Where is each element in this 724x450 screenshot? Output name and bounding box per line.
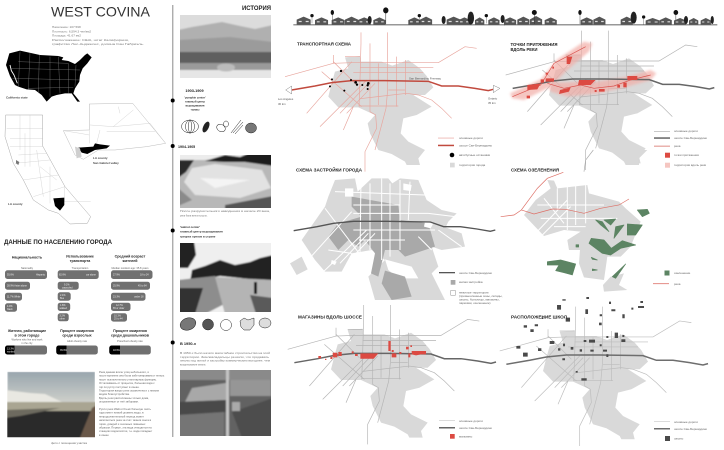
- text block: pumpkin center 1903-1909: главный центр: [185, 100, 205, 104]
- photo: aerial view: [178, 368, 273, 438]
- heading: attraction points along the river: ТОЧКИ ПРИТЯЖЕНИЯ: [510, 42, 558, 47]
- chart: transport use: 3.2%: [60, 314, 66, 318]
- legend: schools: [654, 420, 707, 441]
- chart: nationality: [5, 256, 47, 312]
- chart: preschool obesity: Процент ожирения: [113, 329, 147, 333]
- text block: walnut center: [180, 225, 223, 238]
- chart: nationality: black: [7, 308, 13, 311]
- photo: flooded river: [180, 155, 271, 208]
- map: California counties: [5, 115, 91, 224]
- photo: concrete river channel: [5, 372, 97, 440]
- chart: preschool obesity: 18.6%: [113, 349, 121, 352]
- text block: river description: Территория вокруг реки ограничена и с низким: [99, 388, 159, 392]
- legend: schools: школы: [674, 436, 683, 440]
- text block: pumpkin center 1903-1909: тыквы: [191, 108, 200, 112]
- chart: median age: 18 to 24: [140, 274, 149, 276]
- heading: shops: МАГАЗИНЫ ВДОЛЬ ШОССЕ: [298, 314, 362, 320]
- text block: river description: станциях водоочистки, т.е. вода попадает: [99, 430, 153, 433]
- heading: population data: ДАННЫЕ ПО НАСЕЛЕНИЮ ГОРОДА: [4, 240, 113, 246]
- text block: river description: [99, 370, 165, 437]
- legend: schools: шоссе Сан-Бернардино: [674, 427, 707, 431]
- text block: city facts: Площадь: 41.67 км2: [52, 34, 81, 38]
- text block: river description: Русло реки Walnut Creek большую часть: [99, 407, 151, 411]
- chart: median age: under 18: [134, 296, 144, 298]
- text block: city facts: Расположение: США, штат Калифорния,: [52, 38, 129, 42]
- chart: transport use: [58, 255, 99, 321]
- map: attraction points along the river: [506, 31, 714, 170]
- chart: transport use: carpooled: [62, 286, 73, 289]
- text block: river description: горах, дождей и сезонных ливневых: [99, 422, 146, 426]
- legend: city development: школы, больницы, магазины,: [459, 298, 500, 302]
- text block: city facts: Население: 107.598: [52, 25, 81, 29]
- chart: transport use: транспорта: [70, 259, 91, 263]
- label: Los Angeles distance: [278, 97, 294, 106]
- icons: walnut and crops: [178, 316, 271, 332]
- label: Los Angeles distance: 30 km: [278, 102, 286, 106]
- chart: transport use: car alone: [86, 274, 97, 276]
- text block: pumpkin center 1903-1909: выращивания: [186, 104, 205, 108]
- chart: transport use: 1.8%: [60, 304, 66, 307]
- text block: 1950s development: В 1950-х было начато масштабное строительство на этой: [180, 351, 271, 355]
- chart: residents working in the city: в этом городе: [15, 333, 39, 337]
- icons: pumpkin and crops: [182, 120, 256, 134]
- chart: transport use: other: [60, 318, 65, 320]
- text block: river description: после времени она была забетонирована и теперь: [99, 374, 165, 378]
- legend: attraction points: [654, 129, 707, 168]
- legend: city development: шоссе Сан-Бернардино: [459, 271, 492, 275]
- chart: residents working in the city: Workers who live and work: [12, 337, 43, 341]
- label: LA county San Gabriel valley: San Gabriel valley: [93, 161, 119, 165]
- text block: river description: в океан: [99, 434, 109, 437]
- chart: median age: 12.7%: [116, 304, 124, 307]
- heading: schools: РАСПОЛОЖЕНИЕ ШКОЛ: [511, 314, 567, 320]
- map: United States with California highlighted: [6, 51, 92, 102]
- text block: river description: гор по руслу поступает в океан.: [99, 386, 140, 389]
- chart: median age: 65 or older: [113, 307, 125, 310]
- legend: attraction points: точки притяжения: [674, 153, 699, 157]
- caption: flood: [180, 210, 270, 217]
- legend: transport: территория города: [459, 163, 486, 167]
- chart: residents working in the city: in the city: [22, 341, 33, 345]
- chart: nationality: 11.7% White: [7, 296, 21, 298]
- legend: transport: автобусные остановки: [459, 153, 491, 157]
- text: 1950s: В 1950-х: [180, 341, 197, 346]
- legend: schools: основные дороги: [674, 420, 698, 424]
- legend: transport: основные дороги: [459, 136, 483, 140]
- chart: median age: [111, 255, 152, 322]
- map: transport scheme: [285, 32, 500, 172]
- text block: river description: Вдоль реки расположены только дома,: [99, 396, 149, 400]
- text block: walnut center: 'walnut center': [180, 225, 200, 229]
- heading: attraction points along the river: [510, 42, 558, 52]
- text block: river description: года имеет низкий уровень воды, в: [99, 411, 144, 415]
- legend: city development: жилая застройка: [459, 280, 483, 284]
- legend: attraction points: река: [674, 144, 681, 148]
- chart: adult obesity: [56, 329, 98, 354]
- heading: attraction points along the river: ВДОЛЬ РЕКИ: [510, 47, 538, 52]
- text block: pumpkin center 1903-1909: 1903-1909: [185, 89, 204, 93]
- chart: transport use: 9.2%: [64, 283, 70, 286]
- chart: nationality: Nationality: [21, 266, 34, 270]
- chart: nationality: Hispanic: [36, 274, 46, 276]
- heading: greenery scheme: СХЕМА ОЗЕЛЕНЕНИЯ: [511, 168, 559, 172]
- label: California state: California state: [6, 96, 28, 100]
- text block: 1950s development: землю под жильё и застройку коммерческим выгоднее, чем: [180, 359, 270, 363]
- chart: median age: 45 to 64: [138, 284, 147, 288]
- text block: river description: образом. Первое, эта вода очищается на: [99, 426, 152, 430]
- text block: city facts: [52, 25, 144, 46]
- text: 1904-1905: 1904-1905: [178, 145, 195, 149]
- chart: nationality: 55.6%: [7, 274, 15, 276]
- caption: site visit photo: фото с посещения участка: [51, 441, 87, 445]
- map: school locations: [500, 297, 708, 446]
- label: LA county San Gabriel valley: LA county: [93, 156, 108, 160]
- title: WEST COVINA: [51, 4, 151, 20]
- skyline left: [293, 7, 505, 25]
- caption: flood: После разрушительного наводнения в начале 20 века,: [180, 210, 270, 213]
- timeline axis: [171, 5, 175, 437]
- text block: 1950s development: [180, 351, 271, 366]
- chart: adult obesity: Процент ожирения: [60, 329, 94, 333]
- text block: city facts: графство Лос-Анджелес, долина Сан Габриэль.: [52, 42, 144, 46]
- caption: flood: река бала взята в русло.: [180, 214, 208, 217]
- legend: city development: (промышленные зоны, склады,: [459, 294, 503, 298]
- chart: median age: 10.1%: [114, 314, 122, 318]
- chart: transport use: 2.4%: [60, 294, 66, 297]
- heading: city development: СХЕМА ЗАСТРОЙКИ ГОРОДА: [296, 166, 363, 172]
- text block: river description: носит исключительно утилитарную функцию.: [99, 377, 157, 381]
- label: Ontario distance: 35 km: [488, 101, 496, 105]
- text block: 1950s development: возделывание земли.: [180, 363, 206, 366]
- chart: residents working in the city: Жители, работающие: [7, 329, 46, 333]
- chart: median age: Средний возраст: [115, 255, 146, 259]
- text block: walnut center: главный центр выращивания: [180, 230, 223, 234]
- chart: residents working in the city: [5, 329, 47, 354]
- chart: median age: 27.9%: [113, 274, 121, 276]
- chart: preschool obesity: Preschool obesity rate: [117, 339, 143, 343]
- label: LA county: LA county: [8, 202, 23, 206]
- chart: transport use: Bus: [60, 297, 65, 300]
- map: greenery scheme: [501, 150, 649, 292]
- chart: nationality: 4.0%: [7, 305, 13, 308]
- label: LA county San Gabriel valley: [93, 156, 119, 165]
- legend: greenery: озеленение: [674, 271, 691, 275]
- legend: greenery: [653, 270, 691, 286]
- map: shops along the highway: [288, 305, 496, 444]
- chart: transport use: 82.6%: [59, 274, 67, 276]
- text block: city facts: Плотность: 6,594.3 чел/км2: [52, 29, 91, 33]
- legend: greenery: река: [674, 282, 681, 286]
- chart: median age: 23.3%: [113, 296, 121, 298]
- chart: median age: 25 to 44: [114, 318, 123, 320]
- legend: attraction points: территория вдоль реки: [674, 163, 707, 167]
- text block: river description: Река данная возле улиц небольшого, и: [99, 370, 149, 374]
- heading: transport scheme: ТРАНСПОРТНАЯ СХЕМА: [297, 42, 352, 46]
- legend: shops: магазины: [459, 434, 472, 438]
- text block: 1950s development: территории. Землевладельцы решили, что продавать: [180, 355, 270, 359]
- legend: shops: шоссе Сан-Бернардино: [459, 426, 492, 430]
- chart: transport use: walked: [60, 307, 68, 310]
- chart: nationality: 28.9% Asian alone: [7, 284, 27, 288]
- photo: walnut grove: [178, 241, 273, 314]
- legend: shops: основные дороги: [459, 419, 483, 423]
- text block: pumpkin center 1903-1909: 'pumpkin center': [184, 96, 206, 100]
- chart: nationality: Национальность: [12, 256, 43, 260]
- label: Los Angeles distance: Los Angeles: [278, 97, 294, 101]
- legend: transport: шоссе Сан-Бернардино: [459, 144, 492, 148]
- text block: river description: наполняться река за счёт таяния снега в: [99, 418, 152, 422]
- chart: adult obesity: среди взрослых: [62, 333, 92, 337]
- chart: transport use: Использование: [66, 255, 94, 259]
- text block: river description: огороженные от неё заборами.: [99, 400, 139, 404]
- text block: pumpkin center 1903-1909: [184, 89, 206, 112]
- legend: attraction points: основные дороги: [674, 129, 698, 133]
- legend: transport: [438, 136, 492, 167]
- chart: residents working in the city: worked: [7, 351, 15, 354]
- text block: river description: видом благоустройства.: [99, 392, 130, 396]
- chart: median age: жителей: [122, 259, 137, 263]
- text block: river description: непродолжительный период может: [99, 414, 145, 418]
- legend: city development: нежилые территории: [459, 290, 489, 294]
- chart: residents working in the city: 13.3%: [7, 348, 15, 350]
- legend: city development: [439, 271, 503, 305]
- skyline right: [504, 10, 717, 25]
- chart: median age: Median resident age: 35.8 years: [111, 266, 149, 270]
- label: Ontario distance: Ontario: [488, 96, 498, 100]
- chart: median age: 25.9%: [113, 284, 121, 288]
- map: LA county and San Gabriel valley: [63, 103, 166, 159]
- chart: adult obesity: Adult obesity rate: [67, 339, 88, 343]
- chart: preschool obesity: среди дошкольников: [111, 333, 150, 337]
- text block: river description: Отталкиваясь от процесса, большая вода с: [99, 381, 155, 385]
- label: San Bernardino Freeway: San Bernardino Freeway: [409, 76, 442, 80]
- map: city development: [290, 178, 495, 300]
- label: Ontario distance: [488, 96, 498, 105]
- legend: shops: [439, 419, 492, 439]
- chart: transport use: Transportation: [72, 266, 89, 270]
- legend: attraction points: шоссе Сан-Бернардино: [674, 136, 707, 140]
- legend: city development: парковки, озеленение): [459, 301, 491, 305]
- photo: historic bird's-eye view: [178, 13, 273, 80]
- chart: adult obesity: 35.6%: [60, 349, 68, 352]
- chart: preschool obesity: [109, 329, 151, 354]
- text block: walnut center: грецких орехов в стране: [180, 234, 216, 238]
- heading: history: ИСТОРИЯ: [242, 6, 271, 12]
